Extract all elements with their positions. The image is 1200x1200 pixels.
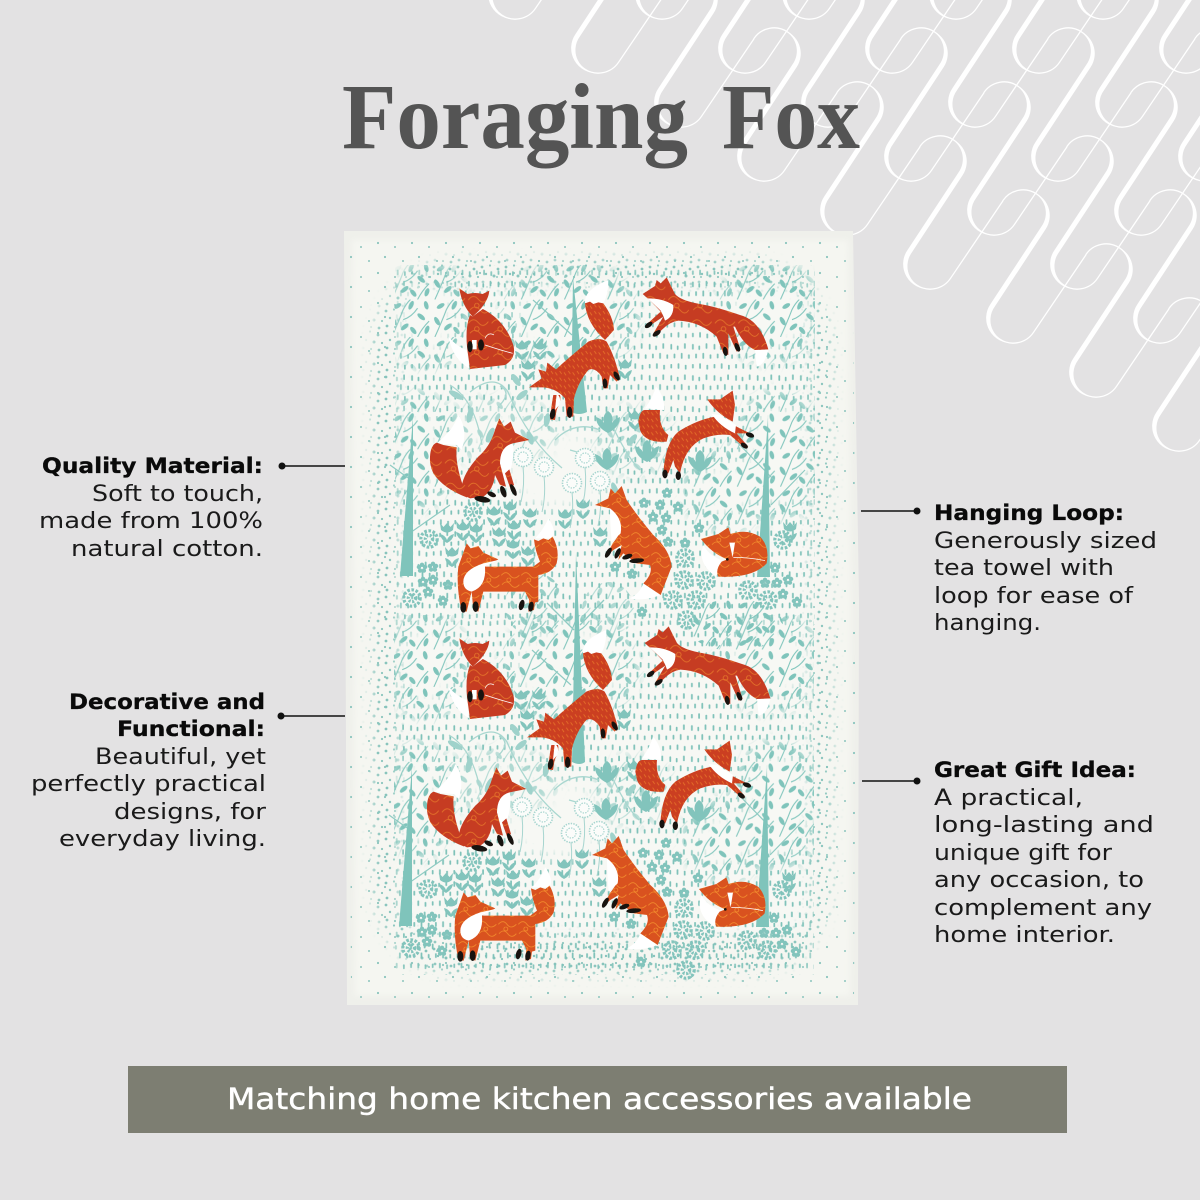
fox sitting lower: [448, 638, 514, 719]
fox seated orange lower: [592, 836, 669, 949]
fox standing lower: [455, 867, 555, 962]
callout: decorative and functional: Beautiful, yet: [95, 745, 266, 770]
banner: Matching home kitchen accessories available: [227, 1082, 972, 1116]
towel fabric: [344, 231, 859, 1005]
pointer: great gift idea: [862, 778, 920, 784]
callout: quality material: Soft to touch,: [92, 482, 263, 507]
title: Fox: [722, 66, 860, 169]
callout: great gift idea: A practical,: [934, 786, 1083, 811]
callout: decorative and functional: perfectly practical: [31, 772, 266, 797]
pointer: quality material: [278, 462, 345, 470]
pointer: hanging loop: [861, 508, 920, 514]
fox standing: [458, 518, 558, 613]
sparse dot border: [348, 236, 856, 1001]
upper forest pattern: [390, 265, 815, 628]
fox running: [638, 387, 755, 480]
fox curled: [701, 527, 767, 577]
callout: great gift idea: home interior.: [934, 923, 1115, 948]
pointer: decorative and functional: [278, 712, 345, 720]
fox sitting large lower: [427, 764, 526, 853]
fox running lower: [635, 737, 752, 830]
callout: hanging loop: Hanging Loop:: [934, 501, 1124, 525]
callout: hanging loop: Generously sized: [934, 529, 1157, 554]
callout: quality material: natural cotton.: [71, 537, 263, 562]
callout: great gift idea: long-lasting and: [934, 813, 1154, 838]
callout: quality material: made from 100%: [39, 509, 263, 534]
fox curled lower: [699, 877, 765, 927]
towel inner panel: [352, 240, 851, 996]
fox sitting: [448, 288, 514, 369]
callout: hanging loop: loop for ease of: [934, 584, 1134, 609]
vines lower right: [687, 599, 783, 651]
callout: great gift idea: [934, 758, 1154, 948]
upper centre tree: [571, 278, 587, 414]
fox seated orange: [595, 486, 672, 599]
banner: [128, 1066, 1067, 1133]
callout: hanging loop: [934, 501, 1157, 636]
callout: great gift idea: any occasion, to: [934, 868, 1144, 893]
fox jumping down lower: [527, 630, 619, 770]
title: Foraging: [342, 66, 688, 169]
fox group upper: [430, 277, 768, 613]
callout: hanging loop: hanging.: [934, 611, 1041, 636]
callout: decorative and functional: Functional:: [117, 717, 265, 741]
title: [342, 66, 860, 169]
dense dot field: [360, 248, 844, 988]
background pattern: white paper-clip links: [488, 0, 1200, 451]
tea towel product illustration: [344, 231, 859, 1005]
callout: decorative and functional: designs, for: [114, 800, 267, 825]
fox leaping: [643, 277, 768, 367]
callout: decorative and functional: [31, 690, 267, 852]
callout: great gift idea: complement any: [934, 896, 1152, 921]
fox sitting large: [430, 415, 529, 504]
callout: decorative and functional: everyday living.: [59, 827, 266, 852]
fox jumping down: [529, 280, 621, 420]
callout: great gift idea: Great Gift Idea:: [934, 758, 1136, 782]
fox leaping lower: [645, 626, 770, 716]
callout: decorative and functional: Decorative and: [69, 690, 265, 714]
callout: hanging loop: tea towel with: [934, 556, 1114, 581]
callout: quality material: [39, 454, 263, 562]
lower forest pattern: [389, 615, 814, 978]
callout: quality material: Quality Material:: [42, 454, 263, 478]
lower centre tree: [505, 553, 634, 764]
fox group lower: [427, 626, 770, 962]
forest clearing: [398, 285, 810, 935]
callout: great gift idea: unique gift for: [934, 841, 1113, 866]
